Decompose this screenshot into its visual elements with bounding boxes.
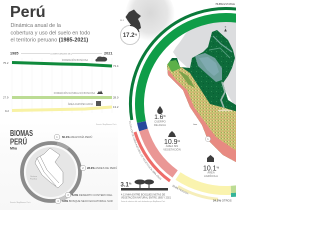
infographic canvas: Fuente: MapBiomas Perú [96, 123, 116, 126]
chart header: 2021 [104, 52, 112, 56]
segment: recovery [178, 186, 218, 199]
biome legend 4: 4.8% BOSQUE SECO ECUATORIAL SUR [62, 199, 113, 203]
land cover: river wetlands [213, 36, 232, 52]
biome legend 1: 60.1% AMAZONÍA PERÚ [62, 135, 92, 139]
land cover: non-forest lowland [195, 53, 222, 82]
stat: natural vegetation lost: Datos de cobertura del suelo elaborados por MapBiomas Perú [121, 200, 165, 203]
series: forest formation [3, 56, 119, 68]
segment: agriculture [178, 176, 231, 191]
segment: water [141, 122, 144, 130]
chart header [10, 52, 112, 56]
bottom ring label: 24.2% OTROS [213, 198, 232, 202]
subtitle [10, 23, 90, 44]
bar: loss [121, 188, 168, 190]
title: Perú [10, 4, 46, 21]
top ring label: 74.8% ESTABLE [215, 2, 235, 6]
share donut: 17.2%: % [135, 32, 138, 36]
stat: water bodies: CUERPO [154, 120, 166, 124]
stat: no vegetation: % [178, 139, 181, 143]
biome legend 2: 28.2% ANDES DE PERÚ [87, 166, 117, 170]
stat: natural vegetation lost [120, 180, 172, 203]
icon: crops [96, 101, 101, 106]
stat: no vegetation: 10.9 [164, 139, 178, 146]
stat: agricultural area: % [217, 166, 220, 170]
stat: agricultural area: ÁREA [207, 170, 215, 174]
series: non-forest natural formation: 27.9 [3, 96, 9, 100]
stat: agricultural area: 10.1 [203, 166, 217, 172]
icon: farm [207, 155, 214, 162]
series: agricultural area: 9.2 [5, 109, 9, 113]
stat: water bodies: DE AGUA [154, 123, 166, 127]
infographic canvas [3, 0, 236, 204]
chart header: COBERTURA EN Mha [50, 52, 73, 55]
biome legend 4: 4 [57, 200, 59, 203]
icon: mountain [168, 131, 176, 137]
segment: deforestation [135, 132, 170, 181]
segment: non-forest natural [231, 185, 238, 195]
chart header: 1985 [10, 52, 18, 56]
series: non-forest natural formation: 28.0 [113, 96, 119, 100]
biome map: Peru [35, 148, 63, 188]
icon: water drop [157, 106, 163, 114]
biomes map: Océano [30, 176, 38, 178]
series: agricultural area [5, 101, 119, 113]
ring: inner cover classes [140, 18, 239, 191]
locator label: 38.5 [120, 20, 125, 22]
series: agricultural area: 13.2 [113, 105, 119, 109]
segment: forest [140, 18, 239, 122]
biome legend 3 [65, 192, 113, 198]
stat: no vegetation: VEGETACIÓN [163, 146, 181, 152]
stat: no vegetation [163, 131, 181, 152]
city label: Lima: Lima [193, 124, 198, 126]
series: non-forest natural formation: FORMACIÓN NATURAL NO BOSCOSA [54, 92, 95, 95]
biome legend 4 [55, 198, 113, 204]
icon: trees [134, 180, 154, 188]
series: forest formation: FORMACIÓN BOSCOSA [62, 59, 88, 62]
icon: shrubs [97, 90, 103, 94]
icon: forest [95, 56, 107, 62]
map scale: 100 km [222, 109, 228, 111]
land cover: Andes agriculture [165, 62, 238, 165]
segment: stable forest [130, 9, 239, 120]
series: non-forest natural formation [3, 90, 119, 100]
biome legend 1: 1 [56, 136, 58, 139]
biome legend 3: 6.0% DESIERTO COSTERO DEL [72, 193, 113, 197]
share donut: 17.2% [120, 26, 140, 44]
curved label: recovery: 10.8% PERDIDA [172, 184, 188, 194]
biomes heading [10, 129, 33, 150]
biomes section background [0, 122, 118, 210]
icon: north arrow: N [225, 26, 227, 28]
biome legend 2 [80, 165, 117, 171]
stat: agricultural area [203, 155, 220, 178]
main map disc [145, 23, 307, 185]
land cover: coastal desert [168, 70, 236, 162]
biomes heading: BIOMAS [10, 129, 33, 138]
stat: water bodies [154, 106, 166, 127]
biome legend 2: 2 [82, 167, 84, 170]
series: forest formation: 75.2 [3, 61, 9, 65]
stat: natural vegetation lost: % [129, 182, 132, 186]
biome circle [26, 147, 76, 197]
subtitle: Dinámica anual de la [10, 23, 61, 29]
map marker: biome number: 1 [207, 138, 209, 141]
ring: outer transition classes [130, 9, 239, 199]
curved label: natural loss: ROTACIÓN DE ÁREA NATURAL DE VEGETACIÓN 10% AÑOS [129, 121, 162, 180]
stat: no vegetation: ÁREA SIN [166, 144, 178, 148]
icon: north arrow [224, 26, 227, 32]
biome legend 3: 3 [67, 194, 69, 197]
map marker: biome number [205, 136, 211, 142]
stat: water bodies: % [163, 114, 166, 118]
stat: natural vegetation lost: VEGETACIÓN NATURAL ENTRE 1985 Y 2021 [121, 196, 172, 200]
biomes heading: PERÚ [10, 138, 27, 146]
segment: natural teal [231, 192, 238, 197]
share donut: 17.2%: 17.2 [123, 33, 135, 39]
line chart: land cover 1985-2021 [3, 52, 119, 113]
subtitle: el territorio peruano (1985-2021) [10, 38, 88, 44]
segment: no vegetation [144, 130, 175, 174]
map scale [218, 109, 232, 111]
series: agricultural area: ÁREA AGROPECUARIA [68, 103, 93, 106]
biomes map: Pacífico [30, 178, 38, 180]
locator map: South America backdrop [125, 0, 175, 44]
source note: Fuente: MapBiomas Perú [10, 201, 30, 204]
neighbouring land [173, 22, 236, 108]
biomes heading: Mha [10, 146, 17, 150]
biome legend 1 [54, 134, 92, 140]
stat: natural vegetation lost: 3.1 [120, 182, 129, 188]
stat: water bodies: 1.6 [154, 114, 163, 121]
icon: Peru silhouette [126, 10, 141, 30]
biomes map [22, 134, 117, 204]
Peru land cover map [167, 30, 236, 162]
series: forest formation: 73.4 [113, 64, 119, 68]
stat: agricultural area: AGRÍCOLA [204, 174, 218, 178]
stat: natural vegetation lost: 4.13 MHA ENTRE BOSQUES NETAS DE [121, 194, 166, 196]
subtitle: cobertura y uso del suelo en todo [10, 30, 90, 36]
